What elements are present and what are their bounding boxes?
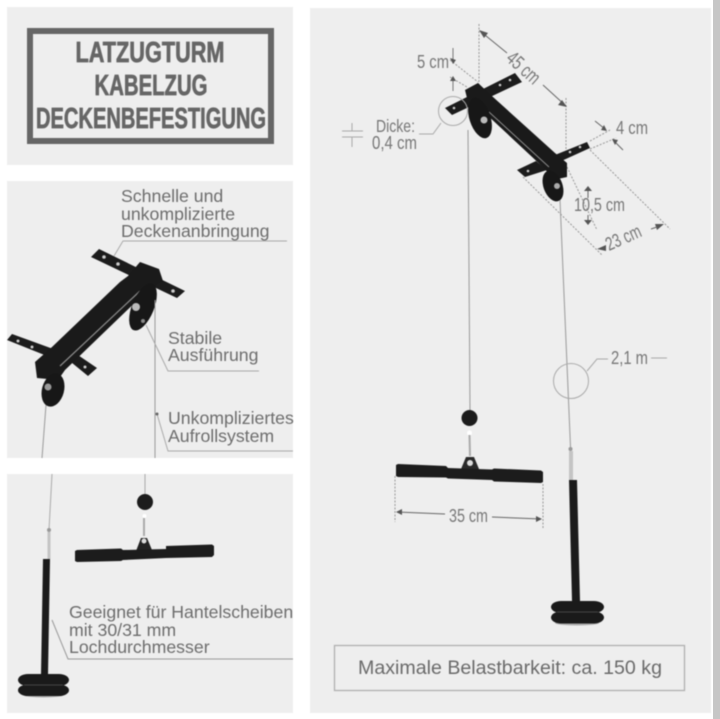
- label: ceiling mounting: Deckenanbringung: [121, 221, 270, 241]
- label: roll-up system: Unkompliziertes: [168, 408, 294, 428]
- title text: KABELZUG: [94, 70, 208, 102]
- label: plate bore: [52, 602, 293, 659]
- weight post: [551, 447, 604, 626]
- dimension: 45 cm: 45 cm: [502, 47, 545, 89]
- thickness callout: Dicke:: [376, 116, 415, 136]
- label: plate bore: mit 30/31 mm: [69, 620, 176, 640]
- dimension: 4 cm: [595, 118, 648, 150]
- title text: LATZUGTURM: [76, 37, 224, 69]
- title frame: [30, 31, 271, 141]
- dimension: 23 cm: 23 cm: [602, 221, 645, 256]
- dimension: 35 cm: 35 cm: [449, 506, 488, 526]
- dimension: 5 cm: [417, 48, 456, 91]
- label: stable design: Ausführung: [168, 345, 258, 365]
- dimension: 45 cm: [479, 30, 567, 107]
- thickness callout: [342, 96, 468, 153]
- dimension lines: [450, 24, 670, 255]
- dimension: 2.1 m: [554, 348, 667, 398]
- dimension: 10.5 cm: 10,5 cm: [574, 195, 625, 215]
- mount illustration with dimensions: [445, 73, 590, 204]
- weight post illustration: [18, 474, 69, 698]
- label: ceiling mounting: [114, 186, 287, 256]
- label: roll-up system: [156, 408, 294, 451]
- max load box: Maximale Belastbarkeit: ca. 150 kg: [358, 657, 662, 679]
- max load box: [334, 646, 684, 690]
- dimension: 10.5 cm: [574, 186, 625, 225]
- label: stable design: [146, 325, 259, 371]
- dimension: 5 cm: 5 cm: [417, 52, 449, 72]
- panel: bar and weight post: [7, 474, 293, 713]
- label: roll-up system: Aufrollsystem: [168, 426, 274, 446]
- dimension: 35 cm: [395, 476, 543, 529]
- panel: ceiling mount features: [7, 181, 294, 458]
- bar handle illustration: [75, 474, 214, 562]
- panel: dimensions: [310, 8, 711, 713]
- mount product illustration: [7, 249, 185, 409]
- title text: DECKENBEFESTIGUNG: [36, 103, 266, 135]
- label: stable design: Stabile: [168, 328, 222, 348]
- dimension: 2.1 m: 2,1 m: [611, 348, 648, 368]
- title text: [36, 37, 266, 135]
- label: ceiling mounting: Schnelle und: [121, 186, 223, 206]
- cables: [468, 130, 570, 447]
- label: plate bore: Geeignet für Hantelscheiben: [69, 602, 293, 622]
- thickness callout: 0,4 cm: [372, 133, 417, 153]
- label: ceiling mounting: unkomplizierte: [121, 204, 235, 224]
- right edge strip: [713, 0, 720, 719]
- panel: title: [7, 7, 293, 165]
- cables: [42, 300, 155, 458]
- label: plate bore: Lochdurchmesser: [69, 637, 210, 657]
- dimension: 4 cm: 4 cm: [616, 118, 648, 138]
- bar handle with ball: [396, 410, 543, 483]
